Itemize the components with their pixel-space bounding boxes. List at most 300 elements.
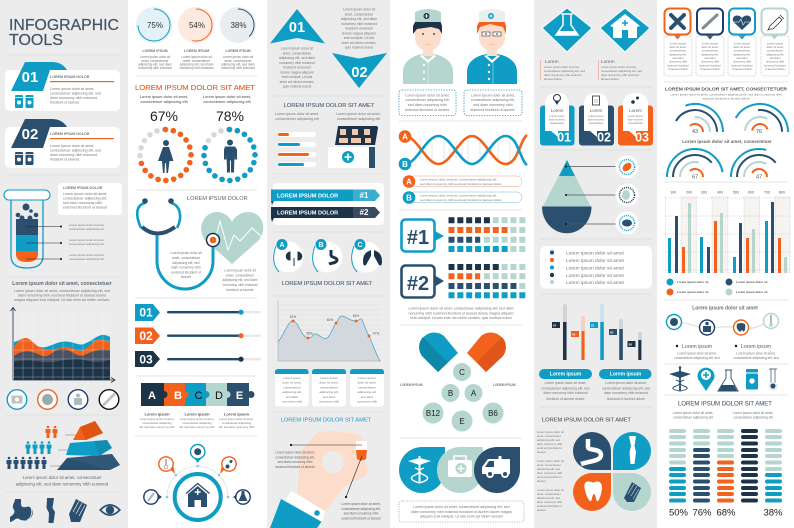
- arc gauges: [659, 94, 794, 205]
- icon: knee: [46, 498, 55, 523]
- DNA legend: Lorem ipsum dolor sit amet, consectetuer adipiscing elit,: [420, 178, 497, 182]
- icon: flask: [718, 370, 738, 391]
- text block: petals: Lorem ipsum dolor sit: [537, 430, 564, 434]
- card 02: Lorem ipsum: [588, 114, 604, 118]
- text block: right of stethoscope: tincidunt ut laoreet: [227, 288, 254, 292]
- gauge 67: 67: [692, 174, 698, 180]
- numbered sliders: [135, 304, 261, 367]
- icon: pill bottle: [746, 369, 758, 390]
- text block right of triangle 01: amet, consectetuer: [345, 12, 374, 16]
- text blocks under rings: nonummy nibh euismod: [180, 66, 214, 70]
- text block right of triangle 01: Lorem ipsum dolor sit: [343, 8, 375, 12]
- text block: gender stats: Lorem ipsum dolor sit amet,: [140, 95, 188, 99]
- text block: pyramid caption: Lorem ipsum dolor sit amet, consectetuer: [23, 475, 102, 480]
- DNA legend: Lorem ipsum dolor sit amet, consectetuer adipiscing elit,: [420, 194, 497, 198]
- ribbon 1: [271, 190, 380, 205]
- heading: progress bars: LOREM IPSUM DOLOR SIT AMET: [284, 103, 375, 109]
- text block: progress bars: consectetuer adipiscing elit: [275, 117, 319, 121]
- text block: pill bars: consectetuer adipiscing elit: [673, 416, 713, 420]
- progress rings: 54%: [189, 21, 205, 30]
- pin tiles: sed diam: [672, 56, 684, 60]
- text block: progress bars: Lorem ipsum dolor sit amet,: [275, 112, 319, 116]
- organ badges: A: [279, 242, 285, 249]
- text block: hand right: euismod tincidunt ut laoreet: [342, 516, 381, 520]
- bar chart: 500: [733, 190, 739, 194]
- text block: under pills: consectetuer adipiscing elit, sed: [602, 386, 650, 390]
- text block left of triangle 02: dolore magna aliquam: [280, 70, 314, 74]
- DNA legend: sed diam nonummy nibh euismod tincidunt ut laoreet dolore: [420, 198, 502, 202]
- dashed box: drops caption: Lorem ipsum dolor sit amet, consectetuer adipiscing elit, sed: [413, 505, 510, 509]
- card 03: Lorem: [629, 108, 642, 113]
- germ icons: [616, 156, 638, 234]
- text block: progress bars: Lorem ipsum dolor sit amet,: [336, 112, 381, 116]
- text block: pill bars: Lorem ipsum dolor sit amet,: [733, 411, 773, 415]
- pin tiles: Lorem ipsum: [670, 42, 687, 46]
- text block: petals: Lorem ipsum dolor sit: [537, 459, 564, 463]
- text block: petals: amet, consectetuer: [537, 434, 561, 438]
- pin tiles: sed diam: [704, 56, 716, 60]
- icon timeline: [666, 314, 778, 335]
- text block: petals: diam nonummy nibh: [537, 442, 563, 446]
- text block: under pills: diam nonummy nibh euismod: [543, 391, 588, 395]
- icon: medical kit and shelf: [328, 126, 378, 168]
- pill labels: Lorem ipsum: [610, 372, 642, 378]
- text block: petals: amet, consectetuer: [537, 492, 561, 496]
- panel: test tube text: sed diam nonummy nibh: [63, 201, 102, 205]
- line chart: 47%: [373, 332, 379, 336]
- text block left of triangle 02: amet, consectetuer: [283, 52, 312, 56]
- text blocks under rings: amet, consectetuer: [141, 59, 169, 63]
- cards under chart: sed diam: [323, 395, 336, 399]
- card 02: [579, 93, 614, 146]
- title: TOOLS: [9, 32, 63, 49]
- text block: hand left: consectetuer adipiscing elit,: [275, 456, 315, 460]
- text block: timeline: consectetuer adipiscing elit, sed: [733, 356, 779, 360]
- bar chart: 100: [670, 190, 676, 194]
- icon row: medical: [669, 366, 777, 391]
- text blocks under rings: adipiscing elit, sed diam: [180, 62, 214, 66]
- icon: map pin: [698, 368, 714, 391]
- text block: gender stats: [140, 95, 251, 124]
- organ badges: B: [318, 242, 324, 249]
- text block: pyramid caption: [16, 475, 109, 486]
- text blocks under rings: adipiscing elit, sed diam: [138, 62, 172, 66]
- card 01: consectetuer: [550, 121, 565, 125]
- text block left of triangle 02: erat volutpat. Ut wisi: [282, 75, 313, 79]
- heading and text 02: LOREM IPSUM DOLOR: [50, 132, 90, 136]
- square grid #1: [448, 220, 525, 249]
- vitamins: B12: [426, 409, 441, 418]
- text block: under pills: Lorem ipsum dolor sit amet,: [545, 381, 586, 385]
- pin tiles: Lorem ipsum: [734, 42, 751, 46]
- cards under chart: adipiscing elit,: [282, 390, 302, 394]
- vitamins: C: [459, 368, 465, 377]
- vitamins: E: [459, 417, 465, 426]
- text: diamond captions: diam nonummy nibh euismod: [601, 73, 639, 77]
- pill bar chart: [671, 431, 780, 500]
- organ petals: [573, 432, 651, 511]
- vitamins: B6: [488, 409, 498, 418]
- cards under chart: Lorem ipsum: [358, 376, 376, 380]
- panel: test tube text: Lorem ipsum dolor sit amet,: [63, 192, 107, 196]
- pin tiles: adipiscing elit,: [733, 52, 751, 56]
- diamond: house: [600, 8, 650, 52]
- pin tiles: nonummy nibh: [669, 60, 688, 64]
- text block left of triangle 02: Lorem ipsum dolor sit: [281, 46, 313, 50]
- dashed boxes: doctors: [399, 90, 522, 116]
- pin tiles: ut laoreet dolore: [700, 67, 721, 71]
- text: puzzle captions: Lorem ipsum: [184, 412, 210, 416]
- heading and text 01: Lorem ipsum dolor sit amet,: [50, 87, 94, 91]
- text block right of triangle 01: enim ad minim veniam,: [342, 41, 376, 45]
- icon: stethoscope: [137, 198, 220, 289]
- text: puzzle captions: Lorem ipsum dolor sit amet,: [140, 417, 174, 421]
- text block: hand right: sed diam nonummy nibh: [344, 512, 379, 516]
- people pyramid: [6, 421, 120, 470]
- DNA legend: B: [406, 194, 412, 202]
- ribbon 01: 01: [22, 69, 38, 86]
- text block: gender stats: consectetuer adipiscing elit: [203, 100, 251, 104]
- icon: male: [224, 140, 237, 172]
- pin tiles: euismod tincidunt: [764, 63, 786, 67]
- text block: area chart intro: Lorem ipsum dolor sit amet, consectetuer adipiscing elit, sed: [14, 289, 110, 293]
- vertical thermometer bars: 62: [610, 330, 614, 334]
- drop: kit: [437, 447, 483, 493]
- text block right of triangle 01: dolore magna aliquam: [342, 32, 376, 36]
- text block: timeline: Lorem ipsum dolor sit amet,: [736, 352, 776, 356]
- ribbon 2: #2: [360, 208, 369, 217]
- text blocks under rings: LOREM IPSUM: [142, 49, 168, 53]
- panel: test tube text: LOREM IPSUM DOLOR: [63, 186, 103, 190]
- cards under chart: adipiscing elit,: [357, 390, 377, 394]
- heading: organ petals: LOREM IPSUM DOLOR SIT AMET: [542, 418, 632, 424]
- heading and text 02: diam nonummy nibh euismod: [50, 153, 97, 157]
- hospital hub: [144, 444, 250, 520]
- triangle 02: [332, 53, 387, 88]
- pin tiles: nonummy nibh: [733, 60, 752, 64]
- heading and text 01: consectetuer adipiscing elit, sed: [50, 92, 101, 96]
- illustration: doctor 1: [403, 9, 453, 84]
- dashed box: drops caption: aliquam erat volutpat. Ut wisi enim ad minim veniam: [420, 514, 503, 518]
- text: diamond captions: diam nonummy nibh euismod: [544, 73, 582, 77]
- text block: under pills: diam nonummy nibh euismod: [604, 391, 648, 395]
- cards under chart: nonummy nibh: [319, 400, 339, 404]
- text block: pill bars: Lorem ipsum dolor sit amet,: [673, 411, 713, 415]
- text block right of triangle 01: erat volutpat. Ut wisi: [344, 36, 375, 40]
- text block: gender stats: Lorem ipsum dolor sit amet,: [203, 95, 251, 99]
- text block: in stethoscope: laoreet: [181, 275, 191, 279]
- pin tiles: consectetuer: [767, 49, 783, 53]
- line chart: [278, 300, 381, 361]
- text blocks under rings: nonummy nibh euismod: [221, 66, 255, 70]
- organ badges: [272, 239, 382, 272]
- line chart: 62%: [290, 315, 296, 319]
- text block: petals: diam nonummy nibh: [537, 471, 563, 475]
- dashed box: drops caption: diam nonummy nibh euismod tincidunt ut laoreet dolore magna: [411, 510, 512, 514]
- heading and text 01: LOREM IPSUM DOLOR: [50, 75, 90, 79]
- heading: arcs: LOREM IPSUM DOLOR SIT AMET, CONSECTETUER: [665, 86, 788, 92]
- capsule halves: [419, 332, 506, 372]
- text: diamond captions: laoreet dolore: [544, 77, 562, 81]
- text: puzzle captions: Lorem ipsum dolor sit amet,: [219, 417, 254, 421]
- text block: right of stethoscope: amet, consectetuer: [226, 274, 255, 278]
- cards under chart: [275, 369, 384, 406]
- bar chart: 200: [686, 190, 692, 194]
- puzzle: [141, 383, 254, 406]
- text: diamond captions: Lorem ipsum dolor sit amet,: [544, 65, 580, 69]
- tile: thermometer: [697, 8, 723, 40]
- text block: petals: euismod tincidunt ut: [537, 504, 562, 508]
- bar chart: 400: [717, 190, 723, 194]
- percent labels: 68%: [716, 508, 736, 518]
- bar chart legend: Lorem ipsum dolor sit: [736, 290, 768, 294]
- text: diamond captions: laoreet dolore: [601, 77, 619, 81]
- legend card: Lorem ipsum dolor sit amet: [566, 266, 625, 272]
- heading: timeline: Lorem ipsum dolor sit amet: [692, 306, 758, 312]
- pin tiles: nonummy nibh: [766, 60, 785, 64]
- panel: step 01 card: [5, 62, 120, 111]
- text: diamond captions: Lorem ipsum dolor sit amet,: [601, 65, 637, 69]
- text block: area chart intro: [12, 281, 112, 302]
- slider 02: 02: [139, 329, 153, 343]
- dashed box: drops caption: [399, 501, 524, 522]
- card 01: [540, 93, 574, 146]
- pin tiles: consectetuer: [702, 49, 718, 53]
- card 03: consectetuer: [628, 121, 643, 125]
- text block: petals: amet, consectetuer: [537, 463, 561, 467]
- text: puzzle captions: [139, 412, 255, 429]
- petal: tooth: [573, 473, 611, 511]
- panel: ribbons: [271, 183, 384, 225]
- test tube labels: Lorem ipsum dolor sit amet,: [69, 253, 105, 257]
- line chart: 58%: [306, 332, 313, 336]
- DNA helix: B: [402, 160, 408, 169]
- dashed boxes: doctors: consectetuer adipiscing elit,: [471, 98, 515, 102]
- text blocks under rings: amet, consectetuer: [183, 59, 211, 63]
- vertical thermometer bars: 54: [572, 332, 576, 336]
- text block: gender stats: 67%: [150, 108, 178, 124]
- text: diamond captions: consectetuer adipiscing elit, sed: [544, 69, 585, 73]
- dashed text boxes: [664, 36, 789, 76]
- vertical thermometer bars: [552, 304, 642, 360]
- cards under chart: dolor sit amet,: [357, 380, 377, 384]
- icon row: anatomy: [10, 498, 121, 523]
- title: INFOGRAPHIC: [9, 17, 119, 34]
- pin tiles: dolor sit amet,: [766, 45, 784, 49]
- bar chart legend: Lorem ipsum dolor sit: [736, 280, 768, 284]
- pin tiles: Lorem ipsum: [767, 42, 784, 46]
- text block: arcs: Lorem ipsum dolor sit amet, consectetuer adipiscing elit, sed diam nonummy nibh: [670, 92, 782, 96]
- cards under chart: consectetuer: [320, 386, 338, 390]
- text block: right of stethoscope: Lorem ipsum dolor sit: [224, 268, 256, 272]
- bar chart: [665, 190, 790, 273]
- panel: test tube text: consectetuer adipiscing elit,: [63, 196, 107, 200]
- text: puzzle captions: elit, sed diam nonummy nibh: [219, 425, 255, 429]
- legend card: Lorem ipsum dolor sit amet: [566, 258, 625, 264]
- heading: line chart: LOREM IPSUM DOLOR SIT AMET: [282, 281, 373, 287]
- text block: petals: euismod tincidunt ut: [537, 475, 562, 479]
- #1 box: #1: [407, 227, 429, 249]
- vertical thermometer bars: 67: [553, 324, 557, 328]
- test tube labels: Lorem ipsum dolor sit amet,: [69, 238, 105, 242]
- satellite: pill: [190, 444, 205, 463]
- text block: grid caption: Lorem ipsum dolor sit amet, consectetuer adipiscing elit, sed diam: [408, 306, 514, 310]
- text: puzzle captions: consectetuer adipiscing: [182, 421, 212, 425]
- bar chart: 700: [764, 190, 770, 194]
- text: diamond captions: [540, 59, 642, 81]
- text block right of triangle 01: tincidunt ut laoreet: [345, 26, 373, 30]
- big drop: [542, 160, 616, 233]
- cards under chart: consectetuer: [283, 386, 301, 390]
- card 03: Lorem ipsum: [628, 114, 643, 118]
- text block: pill bars: consectetuer adipiscing elit: [733, 416, 773, 420]
- text block: under pills: consectetuer adipiscing elit, sed: [541, 386, 590, 390]
- panel: test tube text: euismod tincidunt ut laoreet: [63, 206, 107, 210]
- text block: hand left: Lorem ipsum dolor sit amet,: [275, 450, 315, 454]
- icon: heart with pulse: [201, 212, 263, 264]
- text block: right of stethoscope: adipiscing elit, sed diam: [222, 278, 258, 282]
- pin tiles: nonummy nibh: [701, 60, 720, 64]
- text block: timeline: [674, 344, 779, 360]
- text blocks under rings: amet, consectetuer: [224, 59, 252, 63]
- progress rings: [136, 7, 256, 43]
- pin tiles: adipiscing elit,: [669, 52, 687, 56]
- text block: in stethoscope: diam nonummy nibh: [171, 266, 201, 270]
- vitamins: [400, 363, 516, 432]
- text block: in stethoscope: Lorem ipsum dolor sit: [170, 251, 202, 255]
- bar chart: 600: [748, 190, 754, 194]
- icon: female: [158, 140, 174, 173]
- text blocks under rings: Lorem ipsum dolor sit: [223, 55, 253, 59]
- triangle 02: 02: [351, 65, 368, 81]
- drop: caduceus: [399, 447, 445, 493]
- dashed boxes: doctors: sed diam nonummy nibh: [473, 103, 513, 107]
- card 02: Lorem: [590, 108, 603, 113]
- tile: bandage: [664, 8, 690, 40]
- icon: thermometer: [769, 369, 777, 390]
- dashed boxes: doctors: sed diam nonummy nibh: [408, 103, 447, 107]
- ribbon 2: LOREM IPSUM DOLOR: [277, 210, 338, 216]
- text: puzzle captions: consectetuer adipiscing: [142, 421, 172, 425]
- text blocks under rings: Lorem ipsum dolor sit: [181, 55, 212, 59]
- satellite: drops: [220, 457, 236, 474]
- pin tiles: dolor sit amet,: [701, 45, 719, 49]
- puzzle: C: [195, 390, 203, 402]
- pin tiles: ut laoreet dolore: [668, 67, 689, 71]
- icon: test tube: [4, 190, 105, 268]
- text block left of triangle 02: quis nostrud exerci: [283, 84, 311, 88]
- cards under chart: nonummy nibh: [282, 400, 302, 404]
- card 01: dolor sit amet,: [549, 118, 565, 122]
- cards 01 02 03: [540, 93, 653, 146]
- text: diamond captions: Lorem: [545, 59, 559, 65]
- card 01: Lorem: [551, 108, 564, 113]
- test tube labels: Lorem ipsum dolor sit amet,: [69, 223, 105, 227]
- heading and text 02: consectetuer adipiscing elit, sed: [50, 148, 101, 152]
- cards under chart: dolor sit amet,: [282, 380, 302, 384]
- square grid #2: [448, 267, 525, 295]
- dot ring: female 67%: [140, 130, 191, 180]
- petal: stomach: [573, 432, 611, 470]
- text block: petals: adipiscing elit, sed: [537, 467, 560, 471]
- pyramid layers: [57, 421, 120, 470]
- DNA legend: [403, 175, 522, 204]
- progress rings: 75%: [147, 21, 163, 30]
- cards under chart: consectetuer: [358, 386, 376, 390]
- card 03: 03: [635, 130, 649, 144]
- text block: petals: laoreet: [537, 450, 546, 454]
- text blocks under rings: Lorem ipsum dolor sit: [140, 55, 170, 59]
- text block left of triangle 02: adipiscing elit, sed diam: [279, 56, 315, 60]
- text block: under pills: tincidunt ut laoreet dolore: [607, 397, 645, 401]
- bar chart legend: Lorem ipsum dolor sit: [677, 290, 709, 294]
- icon: medicine bottles 02: [15, 152, 34, 165]
- tile: heart rate: [729, 8, 755, 40]
- gauge caption: Lorem ipsum dolor sit amet, consectetuer: [682, 139, 772, 144]
- text block: right of stethoscope: nonummy nibh euismod: [222, 283, 258, 287]
- text block: grid caption: erat volutpat. Ut wisi enim ad minim veniam, quis nostrud exerci: [410, 316, 512, 320]
- legend card: Lorem ipsum dolor sit amet: [566, 280, 625, 286]
- text block: timeline: Lorem ipsum: [682, 344, 712, 350]
- card 02: consectetuer: [589, 121, 604, 125]
- text block: timeline: Lorem ipsum dolor sit amet,: [677, 352, 717, 356]
- icon: medicine bottles 01: [15, 95, 34, 108]
- text block: petals: euismod tincidunt ut: [537, 446, 562, 450]
- gauge 47: 47: [756, 174, 762, 180]
- test tube labels: consectetuer adipiscing elit: [69, 227, 104, 231]
- line chart: 60%: [327, 318, 333, 322]
- pill labels: Lorem ipsum: [550, 372, 582, 378]
- text block: area chart intro: magna aliquam erat volutpat. Ut wisi enim ad minim veniam,: [14, 298, 110, 302]
- percent labels: 50%: [669, 508, 689, 518]
- text: puzzle captions: consectetuer adipiscing: [222, 421, 252, 425]
- card 01: Lorem ipsum: [550, 114, 564, 118]
- cards under chart: dolor sit amet,: [319, 380, 339, 384]
- pin tiles: euismod tincidunt: [667, 63, 689, 67]
- pin tiles: consectetuer: [670, 49, 686, 53]
- text block right of triangle 01: nonummy nibh euismod: [341, 22, 377, 26]
- heading: orange: LOREM IPSUM DOLOR SIT AMET: [135, 85, 256, 92]
- puzzle: A: [148, 390, 156, 402]
- text block: gender stats: consectetuer adipiscing elit: [140, 100, 188, 104]
- triangle 01: 01: [289, 20, 305, 36]
- area chart: [10, 308, 115, 382]
- pin tiles: euismod tincidunt: [731, 63, 753, 67]
- legend card: Lorem ipsum dolor sit amet: [566, 273, 625, 279]
- puzzle: D: [215, 390, 223, 402]
- slider 03: 03: [139, 352, 153, 366]
- people: navy row: [6, 457, 46, 469]
- illustration: doctor 2: [467, 9, 517, 84]
- text block: under pills: Lorem ipsum dolor sit amet,: [605, 381, 647, 385]
- pin tiles: dolor sit amet,: [733, 45, 751, 49]
- percent labels: 76%: [692, 508, 712, 518]
- heading and text 01: diam nonummy nibh euismod: [50, 96, 97, 100]
- pill labels: [539, 369, 652, 379]
- text block: hand right: consectetuer adipiscing elit,: [341, 507, 381, 511]
- text block: hand right: Lorem ipsum dolor sit amet,: [341, 502, 381, 506]
- vitamins: B: [448, 389, 453, 398]
- percent labels: 38%: [763, 508, 783, 518]
- card 03: dolor sit amet,: [627, 118, 644, 122]
- test tube labels: consectetuer adipiscing elit: [69, 257, 104, 261]
- card 03: [618, 93, 653, 146]
- text: puzzle captions: Lorem ipsum: [224, 412, 249, 416]
- bar chart legend: [666, 278, 768, 296]
- icon: eye: [99, 504, 121, 516]
- dot ring: male 78%: [204, 130, 255, 180]
- text blocks under rings: nonummy nibh euismod: [138, 66, 172, 70]
